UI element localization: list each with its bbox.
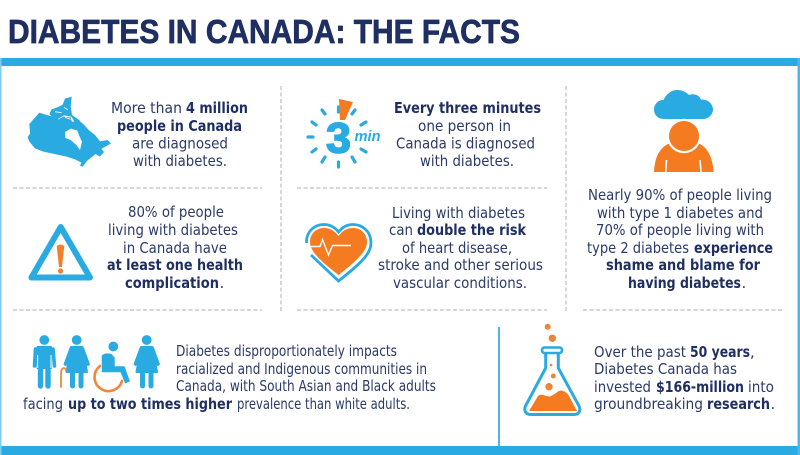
text block: every three minutes: with diabetes. — [420, 153, 514, 170]
text block: double the risk: double the risk — [417, 222, 527, 239]
text block: research investment: Over the past — [594, 344, 686, 361]
icon: wheelchair user — [95, 342, 129, 391]
left frame edge — [0, 58, 2, 455]
text block: research investment: . — [770, 396, 775, 413]
text block: health complication: at least one health — [107, 257, 243, 274]
text block: disproportionate impact: Canada, with South Asian and Black adults — [176, 378, 436, 395]
text block: shame and blame: type 2 diabetes — [587, 240, 689, 257]
text block: shame and blame: 70% of people living with — [596, 222, 764, 239]
text block: disproportionate impact: Diabetes disproportionately impacts — [176, 343, 397, 360]
text block: double the risk: stroke and other serious — [378, 257, 543, 274]
text block: research investment: Diabetes Canada has — [594, 361, 737, 378]
text block: health complication: complication — [125, 275, 219, 292]
text block: every three minutes: one person in — [418, 118, 511, 135]
icon: flask — [525, 324, 580, 414]
text block: disproportionate impact: prevalence than white adults. — [237, 396, 410, 413]
text block: double the risk: vascular conditions. — [393, 275, 527, 292]
text block: health complication: living with diabetes — [108, 222, 238, 239]
right frame edge — [798, 58, 800, 455]
bottom blue bar — [0, 446, 800, 455]
text block: 4 million: people in Canada — [117, 118, 242, 135]
icon: heart with pulse — [306, 224, 371, 281]
text block: research investment: research — [707, 396, 770, 413]
icon: woman with cane — [61, 335, 88, 387]
text block: shame and blame: having diabetes — [628, 275, 741, 292]
text block: research investment — [594, 344, 775, 413]
text block: double the risk: Living with diabetes — [392, 205, 525, 222]
text block: research investment: into — [748, 379, 774, 396]
text block: research investment: , — [750, 344, 755, 361]
text block: research investment: $166-million — [656, 379, 744, 396]
text block: disproportionate impact — [23, 343, 436, 413]
text block: shame and blame: shame and blame for — [606, 257, 761, 274]
text block: shame and blame — [587, 187, 773, 292]
icon: man — [34, 335, 54, 386]
icon: three minutes clock: 3 — [326, 114, 351, 162]
text block: health complication: 80% of people — [128, 204, 224, 221]
text block: health complication — [107, 204, 243, 292]
text block: health complication: . — [220, 275, 224, 292]
text block: shame and blame: experience — [694, 240, 773, 257]
icon: group of people — [34, 335, 158, 391]
top blue bar — [0, 58, 800, 66]
text block: shame and blame: Nearly 90% of people living — [588, 187, 772, 204]
text block: 4 million — [111, 100, 248, 170]
icon: three minutes clock: min — [354, 128, 380, 145]
title: DIABETES IN CANADA: THE FACTS — [8, 13, 520, 50]
text block: research investment: groundbreaking — [594, 396, 703, 413]
bottom vertical divider — [498, 327, 500, 446]
text block: double the risk — [378, 205, 543, 292]
text block: double the risk: can — [389, 222, 413, 239]
text block: double the risk: of heart disease, — [402, 240, 512, 257]
icon: three minutes clock — [308, 99, 380, 167]
text block: disproportionate impact: up to two times higher — [68, 396, 233, 413]
text block: 4 million: More than — [111, 100, 182, 117]
text block: shame and blame: with type 1 diabetes and — [597, 205, 763, 222]
text block: every three minutes — [394, 100, 541, 170]
text block: research investment: 50 years — [690, 344, 750, 361]
icon: person under cloud — [654, 90, 714, 172]
text block: research investment: invested — [594, 379, 651, 396]
text block: every three minutes: Canada is diagnosed — [396, 136, 535, 152]
icon: map of Canada — [28, 97, 111, 167]
icon: warning triangle — [32, 227, 90, 278]
text block: shame and blame: . — [742, 275, 746, 292]
text block: 4 million: are diagnosed — [132, 136, 228, 152]
text block: health complication: in Canada have — [123, 240, 227, 257]
text block: every three minutes: Every three minutes — [394, 100, 541, 117]
text block: disproportionate impact: racialized and Indigenous communities in — [176, 361, 427, 378]
text block: 4 million: 4 million — [186, 100, 248, 117]
text block: disproportionate impact: facing — [23, 396, 63, 413]
icon: woman — [136, 335, 158, 386]
text block: 4 million: with diabetes. — [133, 153, 227, 170]
